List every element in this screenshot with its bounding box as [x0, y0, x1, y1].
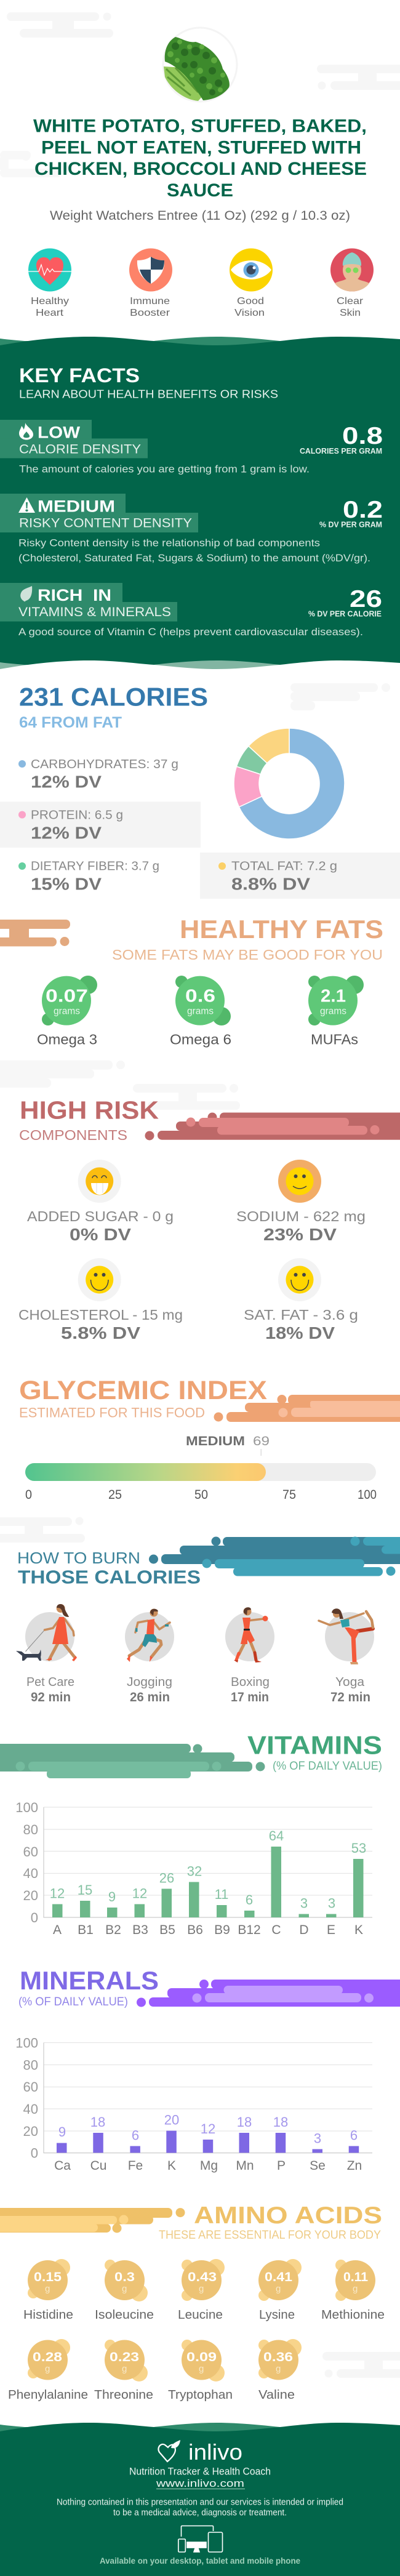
bar chart: minerals: 6	[132, 2127, 139, 2143]
benefit: clear skin: Clear	[337, 296, 364, 307]
background cloud calories	[290, 683, 390, 710]
amino: isoleucine: 0.3	[114, 2270, 135, 2284]
benefit: good vision	[230, 249, 273, 318]
legend: protein: 12% DV	[31, 824, 102, 843]
component: added sugar: 0% DV	[70, 1225, 131, 1244]
heading: key facts: KEY FACTS	[19, 364, 140, 387]
subheading: amino acids: THESE ARE ESSENTIAL FOR YOUR BODY	[159, 2229, 381, 2242]
text: disclaimer	[57, 2497, 343, 2518]
component: saturated fat: 18% DV	[265, 1323, 335, 1342]
fact: rich in vitamins and minerals: A good source of Vitamin C (helps prevent cardiovascular diseases).	[18, 626, 363, 638]
fact: medium risky content density: MEDIUM	[38, 497, 115, 515]
amino: leucine: Leucine	[178, 2308, 223, 2322]
metric: omega 3: grams	[54, 1006, 80, 1017]
icon: warning triangle	[18, 497, 35, 513]
heading: calories: 231 CALORIES	[19, 682, 208, 712]
activity: jogging	[125, 1609, 174, 1704]
heading: those calories: THOSE CALORIES	[18, 1567, 201, 1588]
gauge scale: 25	[108, 1488, 122, 1502]
bar chart: minerals: 100	[15, 2035, 38, 2051]
subheading: vitamins daily value: (% OF DAILY VALUE)	[273, 1760, 382, 1773]
benefit: immune booster: Booster	[130, 308, 170, 318]
fact: medium risky content density: Risky Content density is the relationship of bad components	[18, 537, 320, 548]
benefit: healthy heart	[28, 249, 71, 318]
gauge scale: 100	[358, 1488, 377, 1502]
benefit: good vision: Good	[237, 296, 264, 307]
bar chart: vitamins: 12	[50, 1886, 65, 1901]
icon: devices	[178, 2526, 223, 2552]
panel: high risk	[18, 1096, 400, 1342]
legend: protein: PROTEIN: 6.5 g	[31, 809, 123, 822]
bar chart: minerals: 6	[350, 2127, 358, 2143]
bar chart: vitamins: 6	[246, 1892, 253, 1908]
benefit: immune booster: Immune	[130, 296, 170, 307]
legend: carbohydrates: 12% DV	[31, 772, 102, 792]
decoration: green bars	[0, 1744, 265, 1778]
amino: tryptophan: Tryptophan	[168, 2388, 233, 2402]
subheading: key facts: LEARN ABOUT HEALTH BENEFITS OR RISKS	[19, 388, 278, 400]
icon: leaf	[20, 586, 32, 602]
legend: carbohydrates: CARBOHYDRATES: 37 g	[31, 758, 178, 771]
link: website: www.inlivo.com	[156, 2478, 244, 2489]
panel: minerals	[15, 1966, 400, 2173]
activity: yoga: 72 min	[330, 1690, 370, 1704]
title: CHICKEN, BROCCOLI AND CHEESE	[34, 159, 367, 179]
metric: omega 3	[37, 976, 97, 1047]
activity: boxing: Boxing	[231, 1675, 270, 1689]
panel: glycemic index	[19, 1376, 400, 1502]
amino: valine: g	[276, 2364, 281, 2374]
amino: histidine: Histidine	[23, 2308, 73, 2322]
bar chart: minerals: 9	[58, 2124, 66, 2140]
amino: threonine: Threonine	[94, 2388, 153, 2402]
component: cholesterol: CHOLESTEROL - 15 mg	[18, 1307, 183, 1323]
activity: jogging: Jogging	[127, 1675, 172, 1689]
legend: protein	[0, 801, 201, 848]
legend: dietary fiber	[18, 859, 159, 894]
activity: yoga: Yoga	[335, 1675, 365, 1689]
activity: jogging: 26 min	[130, 1690, 170, 1704]
bar chart: minerals: 20	[164, 2113, 179, 2127]
activity: boxing	[225, 1607, 274, 1704]
fact: low calorie density: CALORIES PER GRAM	[300, 446, 382, 455]
bar chart: vitamins: 9	[108, 1889, 116, 1904]
bar chart: vitamins: 64	[269, 1828, 284, 1844]
background cloud burn	[0, 1517, 85, 1543]
icon: broccoli photo	[163, 28, 237, 102]
component: cholesterol: 5.8% DV	[61, 1323, 140, 1342]
fact: medium risky content density: (Cholesterol, Saturated Fat, Sugars & Sodium) to the amount (%DV/gr).	[18, 552, 370, 564]
amino: methionine	[321, 2260, 385, 2322]
amino: leucine: 0.43	[188, 2270, 217, 2284]
bar chart: minerals: 3	[314, 2131, 321, 2146]
background clouds high risk	[0, 1061, 240, 1110]
metric: mufas: MUFAs	[311, 1031, 358, 1047]
amino: lysine: g	[276, 2284, 281, 2294]
amino: isoleucine	[95, 2260, 154, 2322]
bar chart: vitamins: K	[354, 1923, 363, 1937]
legend: dietary fiber: 15% DV	[31, 874, 102, 894]
amino: isoleucine: g	[122, 2284, 127, 2294]
bar chart: vitamins: 53	[351, 1840, 366, 1856]
legend: dietary fiber: DIETARY FIBER: 3.7 g	[31, 859, 159, 873]
subheading: healthy fats: SOME FATS MAY BE GOOD FOR YOU	[112, 947, 383, 963]
amino: leucine: g	[199, 2284, 204, 2294]
bar chart: minerals: Mg	[200, 2159, 218, 2173]
metric: omega 6: 0.6	[185, 987, 215, 1006]
benefit: clear skin: Skin	[340, 308, 361, 318]
component: sodium	[236, 1160, 366, 1244]
bar chart: vitamins: B6	[187, 1923, 203, 1937]
amino: threonine	[94, 2340, 153, 2402]
decoration: orange bars	[214, 1395, 400, 1422]
fact: rich in vitamins and minerals	[0, 583, 382, 638]
decoration: red bars	[145, 1113, 400, 1140]
text: disclaimer: Nothing contained in this presentation and our services is intended or implied	[57, 2497, 343, 2507]
amino: methionine: 0.11	[343, 2270, 368, 2284]
fact: medium risky content density: % DV PER GRAM	[319, 520, 382, 529]
background cloud amino	[322, 2352, 400, 2378]
benefit: immune booster	[129, 249, 172, 318]
panel: calories	[0, 682, 400, 899]
amino: leucine	[178, 2259, 225, 2322]
panel: burn calories	[16, 1536, 400, 1704]
logo: inlivo	[158, 2439, 242, 2465]
amino: valine: Valine	[258, 2388, 295, 2402]
bar chart: vitamins: 3	[300, 1896, 308, 1911]
bar chart: vitamins: 15	[78, 1882, 92, 1898]
bar chart: vitamins: 60	[23, 1844, 38, 1860]
title	[33, 116, 367, 201]
heading: minerals: MINERALS	[20, 1966, 159, 1995]
activity: yoga	[319, 1608, 374, 1704]
amino: lysine: 0.41	[265, 2270, 292, 2284]
bar chart: vitamins: B1	[78, 1923, 94, 1937]
bar chart: minerals: Cu	[90, 2159, 106, 2173]
fact: low calorie density: The amount of calories you are getting from 1 gram is low.	[19, 463, 310, 475]
label: medium 69: MEDIUM	[186, 1434, 245, 1448]
subtitle: Weight Watchers Entree (11 Oz) (292 g / 10.3 oz)	[50, 209, 350, 223]
title: PEEL NOT EATEN, STUFFED WITH	[41, 138, 361, 158]
panel: amino acids	[0, 2202, 400, 2402]
panel: healthy fats	[0, 915, 383, 1047]
fact: medium risky content density: 0.2	[343, 497, 383, 523]
bar chart: minerals: K	[167, 2159, 176, 2173]
legend: total fat: 8.8% DV	[231, 874, 310, 894]
component: saturated fat	[244, 1258, 358, 1342]
component: cholesterol	[18, 1258, 183, 1342]
metric: mufas: grams	[320, 1006, 346, 1017]
bar chart: vitamins: 11	[215, 1887, 228, 1902]
amino: phenylalanine: g	[45, 2364, 50, 2374]
heading: glycemic index: GLYCEMIC INDEX	[19, 1376, 267, 1405]
legend: carbohydrates	[18, 758, 178, 792]
benefit: healthy heart: Heart	[36, 308, 64, 318]
bar chart: vitamins: 0	[31, 1910, 38, 1925]
bar chart: minerals: 18	[237, 2114, 252, 2130]
amino: lysine: Lysine	[259, 2308, 295, 2322]
text: tagline: Nutrition Tracker & Health Coach	[129, 2466, 271, 2477]
benefit: good vision: Vision	[234, 308, 265, 318]
donut chart	[234, 728, 345, 839]
gauge bar	[25, 1463, 376, 1481]
label: medium 69	[186, 1434, 270, 1456]
bar chart: minerals: Se	[310, 2159, 326, 2173]
bar chart: vitamins: B12	[238, 1923, 261, 1937]
amino: valine	[258, 2339, 302, 2402]
icon: flame	[19, 423, 33, 439]
heading: vitamins: VITAMINS	[247, 1731, 382, 1759]
bar chart: minerals: Zn	[347, 2159, 362, 2173]
amino: tryptophan: g	[199, 2364, 204, 2374]
bar chart: vitamins: B5	[159, 1923, 175, 1937]
amino: methionine: Methionine	[321, 2308, 385, 2322]
decoration: teal bars	[149, 1536, 400, 1576]
bar chart: vitamins: 3	[328, 1896, 335, 1911]
bar chart: vitamins: 32	[187, 1864, 202, 1879]
metric: mufas: 2.1	[321, 987, 346, 1006]
activity: boxing: 17 min	[231, 1690, 269, 1704]
bar chart: vitamins: E	[327, 1923, 335, 1937]
background cloud top right	[317, 65, 400, 90]
legend: total fat	[200, 853, 400, 899]
amino: lysine	[258, 2259, 302, 2322]
label: medium 69: 69	[253, 1434, 270, 1448]
bar chart: vitamins: 12	[132, 1886, 147, 1901]
fact: rich in vitamins and minerals: % DV PER CALORIE	[308, 609, 382, 619]
activity: pet care: Pet Care	[26, 1675, 74, 1689]
metric: omega 6: grams	[187, 1006, 214, 1017]
amino: valine: 0.36	[263, 2350, 293, 2364]
bar chart: vitamins: B2	[105, 1923, 121, 1937]
fact: low calorie density	[0, 420, 383, 475]
bar chart: minerals: 18	[273, 2114, 288, 2130]
bar chart: minerals: P	[277, 2159, 286, 2173]
subheading: estimated for this food: ESTIMATED FOR THIS FOOD	[19, 1405, 205, 1421]
bar chart: vitamins: B9	[214, 1923, 230, 1937]
metric: omega 3: Omega 3	[37, 1031, 97, 1047]
metric: omega 6	[170, 976, 231, 1047]
metric: omega 3: 0.07	[46, 987, 88, 1006]
bar chart: minerals: 0	[31, 2146, 38, 2161]
decoration: purple bars	[137, 1980, 400, 2007]
bar chart: minerals: Mn	[236, 2159, 254, 2173]
fact: low calorie density: CALORIE DENSITY	[19, 442, 141, 456]
heading: healthy fats: HEALTHY FATS	[180, 915, 383, 944]
heading: amino acids: AMINO ACIDS	[194, 2202, 382, 2229]
bar chart: minerals: 80	[23, 2057, 38, 2073]
benefit: clear skin	[330, 249, 374, 318]
bar chart: vitamins: D	[299, 1923, 309, 1937]
amino: threonine: g	[122, 2364, 127, 2374]
fact: rich in vitamins and minerals: RICH IN	[38, 586, 111, 604]
fact: medium risky content density: RISKY CONTENT DENSITY	[19, 516, 192, 531]
amino: histidine: 0.15	[34, 2270, 62, 2284]
amino: threonine: 0.23	[110, 2350, 139, 2364]
gauge scale	[25, 1488, 377, 1502]
panel: key facts	[0, 337, 400, 693]
heading: high risk: HIGH RISK	[20, 1096, 159, 1125]
bar chart: minerals: Ca	[54, 2159, 71, 2173]
amino: methionine: g	[353, 2284, 358, 2294]
bar chart: minerals: 12	[201, 2121, 215, 2137]
amino: phenylalanine: 0.28	[33, 2350, 62, 2364]
logo: inlivo: inlivo	[188, 2439, 242, 2465]
subheading: components: COMPONENTS	[19, 1127, 127, 1143]
title: WHITE POTATO, STUFFED, BAKED,	[33, 116, 367, 137]
fact: medium risky content density	[0, 494, 383, 564]
title: SAUCE	[167, 180, 233, 201]
benefit: healthy heart: Healthy	[31, 296, 69, 307]
bar chart: vitamins: A	[53, 1923, 62, 1937]
bar chart: minerals: 20	[23, 2124, 38, 2139]
bar chart: minerals: 60	[23, 2079, 38, 2095]
component: sodium: 23% DV	[263, 1225, 337, 1244]
bar chart: minerals: 18	[90, 2114, 105, 2130]
bar chart: vitamins: B3	[132, 1923, 148, 1937]
amino: histidine: g	[45, 2284, 50, 2294]
bar chart: vitamins: 20	[23, 1888, 38, 1903]
heading: how to burn: HOW TO BURN	[17, 1549, 140, 1567]
panel: footer	[0, 2423, 400, 2576]
decoration: tan bars	[0, 920, 70, 947]
gauge scale: 50	[194, 1488, 208, 1502]
amino: tryptophan: 0.09	[186, 2350, 217, 2364]
bar chart: vitamins: 26	[159, 1870, 174, 1886]
activity: pet care	[16, 1604, 77, 1704]
amino: phenylalanine: Phenylalanine	[8, 2388, 88, 2402]
fact: low calorie density: 0.8	[342, 423, 383, 449]
amino: isoleucine: Isoleucine	[95, 2308, 154, 2322]
bar chart: vitamins: 100	[15, 1800, 38, 1815]
metric: mufas	[308, 976, 364, 1047]
background cloud top left	[7, 12, 113, 38]
text: disclaimer: to be a medical advice, diagnosis or treatment.	[113, 2508, 287, 2518]
activity: pet care: 92 min	[31, 1690, 71, 1704]
amino: tryptophan	[168, 2340, 233, 2402]
text: availability: Available on your desktop, tablet and mobile phone	[100, 2556, 300, 2566]
fact: rich in vitamins and minerals: VITAMINS & MINERALS	[18, 605, 171, 619]
component: added sugar: ADDED SUGAR - 0 g	[27, 1208, 174, 1224]
subheading: minerals daily value: (% OF DAILY VALUE)	[18, 1996, 128, 2008]
bar chart: minerals: 40	[23, 2101, 38, 2117]
bar chart: vitamins: 80	[23, 1822, 38, 1837]
bar chart: vitamins	[15, 1800, 372, 1937]
component: added sugar	[27, 1160, 174, 1244]
component: saturated fat: SAT. FAT - 3.6 g	[244, 1307, 358, 1323]
bar chart: vitamins: C	[271, 1923, 281, 1937]
background cloud title left	[0, 151, 62, 177]
panel: vitamins	[0, 1731, 382, 1937]
decoration: yellow bars	[0, 2208, 185, 2233]
legend: total fat: TOTAL FAT: 7.2 g	[231, 859, 337, 873]
component: sodium: SODIUM - 622 mg	[236, 1208, 366, 1224]
fact: low calorie density: LOW	[38, 423, 81, 441]
metric: omega 6: Omega 6	[170, 1031, 231, 1047]
gauge scale: 0	[25, 1488, 32, 1502]
bar chart: vitamins: 40	[23, 1866, 38, 1881]
gauge scale: 75	[282, 1488, 296, 1502]
bar chart: minerals	[15, 2035, 372, 2173]
fact: rich in vitamins and minerals: 26	[350, 586, 382, 612]
amino: phenylalanine	[8, 2339, 88, 2402]
bar chart: minerals: Fe	[128, 2159, 143, 2173]
amino: histidine	[23, 2259, 73, 2322]
subheading: fat calories: 64 FROM FAT	[19, 714, 122, 731]
